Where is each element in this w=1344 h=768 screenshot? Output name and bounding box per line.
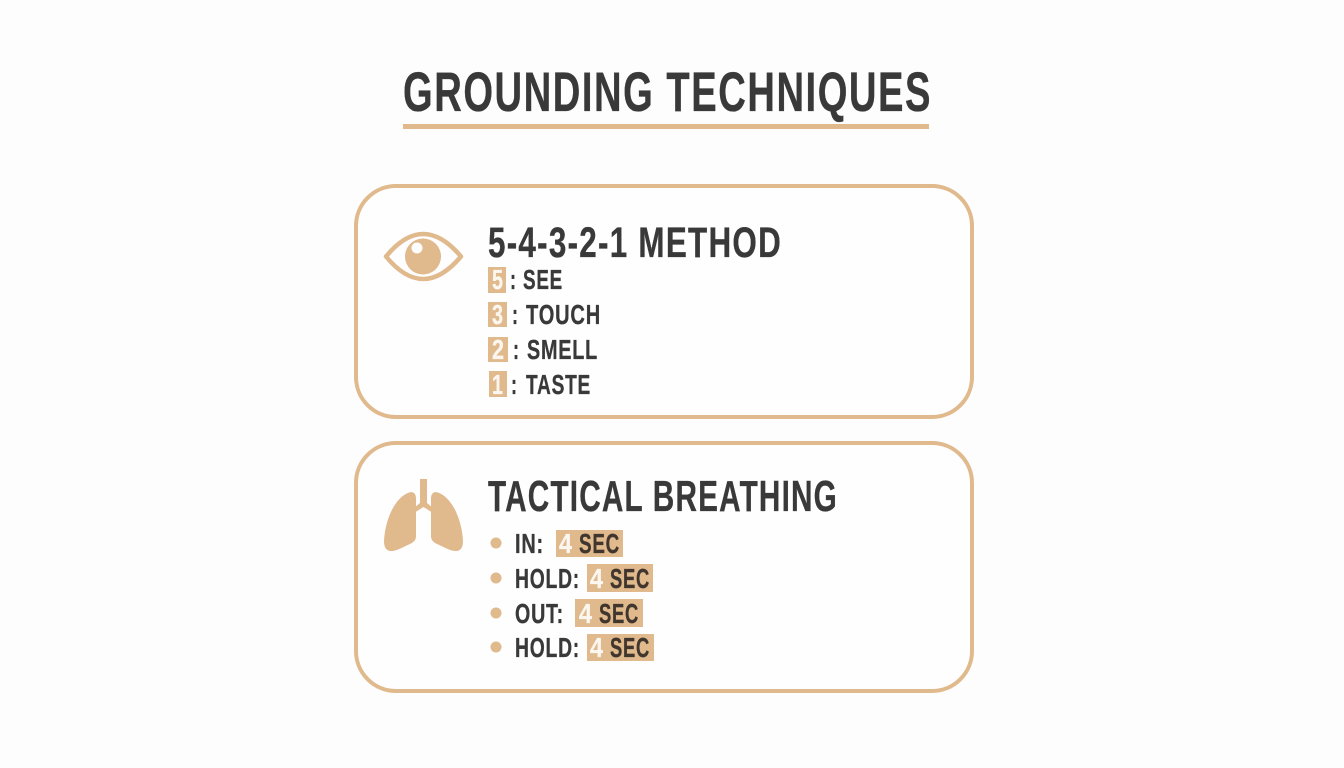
icon: eye — [386, 234, 461, 279]
heading: 5-4-3-2-1 method: 5-4-3-2-1 METHOD — [488, 219, 782, 267]
panel: tactical breathing — [356, 443, 972, 691]
list item: hold 4 sec (second): HOLD: — [515, 632, 580, 663]
title — [403, 60, 932, 129]
list item: 1 taste: : — [511, 369, 517, 400]
list item: 2 smell: SMELL — [527, 334, 598, 365]
list item: out 4 sec: OUT: — [515, 598, 564, 629]
list item: 1 taste: TASTE — [526, 369, 591, 400]
list item: 5 see: 5 — [492, 264, 503, 295]
list item: 1 taste — [489, 369, 591, 400]
panel: 5-4-3-2-1 method — [356, 186, 972, 417]
list item: 3 touch: : — [512, 299, 518, 330]
list item: 2 smell: 2 — [492, 334, 504, 365]
list item: 5 see: SEE — [523, 264, 563, 295]
list item: hold 4 sec — [490, 563, 653, 594]
title underline — [403, 124, 929, 129]
list item: in 4 sec — [490, 528, 623, 559]
list item: hold 4 sec (second) — [490, 632, 654, 663]
icon: lungs — [384, 479, 463, 551]
list item: 3 touch — [488, 299, 601, 330]
list item: out 4 sec — [490, 598, 643, 629]
list item: hold 4 sec (second): 4 — [590, 632, 603, 663]
list item: 2 smell — [488, 334, 598, 365]
list item: in 4 sec: 4 — [559, 528, 572, 559]
list item: 3 touch: TOUCH — [526, 299, 601, 330]
title: GROUNDING TECHNIQUES — [403, 60, 932, 123]
list item: 1 taste: 1 — [492, 369, 503, 400]
list item: hold 4 sec: HOLD: — [515, 563, 580, 594]
list item: 5 see — [488, 264, 563, 295]
list item: hold 4 sec (second): SEC — [610, 632, 650, 663]
heading: tactical breathing: TACTICAL BREATHING — [488, 472, 838, 521]
list item: out 4 sec: 4 — [579, 598, 592, 629]
list item: hold 4 sec: SEC — [610, 563, 650, 594]
list item: in 4 sec: IN: — [515, 528, 544, 559]
list item: 2 smell: : — [513, 334, 519, 365]
list item: in 4 sec: SEC — [579, 528, 620, 559]
list item: out 4 sec: SEC — [599, 598, 639, 629]
list item: 5 see: : — [510, 264, 516, 295]
list item: hold 4 sec: 4 — [590, 563, 603, 594]
list item: 3 touch: 3 — [492, 299, 503, 330]
